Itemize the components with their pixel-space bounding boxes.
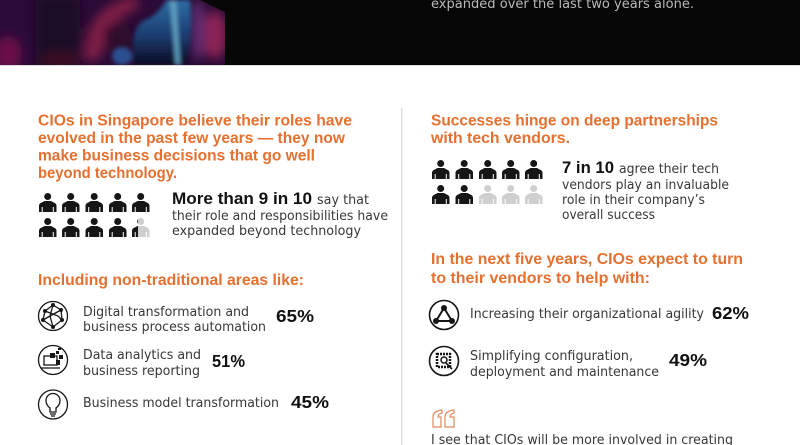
heading: successes hinge: Successes hinge on deep partnerships (431, 112, 718, 130)
stat: more than 9 in 10 (172, 190, 388, 239)
item: data analytics (38, 346, 245, 379)
item: business model: 45% (291, 392, 329, 412)
header band (0, 0, 800, 72)
stat: 7 in 10: overall success (562, 208, 655, 223)
icon: light bulb (38, 390, 68, 419)
item: digital transformation (38, 302, 314, 335)
icon: network (38, 302, 68, 330)
heading: successes hinge (430, 112, 718, 147)
stat: 7 in 10: 7 in 10 (562, 159, 614, 177)
heading: CIOs in Singapore (38, 112, 352, 182)
item: data analytics: Data analytics and (83, 348, 201, 363)
stat: 7 in 10: vendors play an invaluable (562, 178, 729, 193)
stat: more than 9 in 10: More than 9 in 10 (172, 190, 312, 208)
item: simplifying configuration: deployment and maintenance (470, 365, 659, 380)
icon: quotation mark (433, 410, 454, 427)
heading: CIOs in Singapore: CIOs in Singapore believe their roles have (38, 112, 352, 130)
people icons: 9 in 10 (39, 193, 150, 237)
item: digital transformation: business process automation (83, 320, 266, 335)
item: simplifying configuration (430, 346, 707, 380)
item: organizational agility: Increasing their organizational agility (470, 307, 704, 322)
icon: laptop with data (38, 346, 68, 374)
heading: non-traditional areas: Including non-traditional areas like: (38, 272, 304, 289)
icon: agility cycle (430, 300, 458, 330)
heading: CIOs in Singapore: evolved in the past few years — they now (38, 130, 346, 147)
icon: chip (430, 346, 458, 376)
stat: 7 in 10: agree their tech (619, 162, 719, 177)
header abstract image (0, 0, 225, 65)
heading: CIOs in Singapore: make business decisions that go well (38, 148, 315, 164)
item: simplifying configuration: Simplifying configuration, (470, 349, 633, 364)
stat: 7 in 10: role in their company’s (562, 193, 705, 208)
item: organizational agility: 62% (712, 303, 749, 323)
item: business model: Business model transformation (83, 396, 279, 411)
stat: 7 in 10 (562, 159, 729, 223)
column divider (401, 108, 402, 445)
item: simplifying configuration: 49% (669, 350, 707, 370)
item: digital transformation: Digital transformation and (83, 305, 249, 320)
item: organizational agility (430, 300, 749, 330)
item: business model (38, 390, 329, 419)
heading: next five years (431, 251, 743, 287)
stat: more than 9 in 10: their role and responsibilities have (172, 208, 388, 224)
item: data analytics: business reporting (83, 364, 200, 379)
heading: CIOs in Singapore: beyond technology. (38, 165, 177, 182)
heading: next five years: to their vendors to help with: (431, 270, 650, 287)
people icons: 7 in 10 (432, 160, 542, 204)
heading: successes hinge: with tech vendors. (430, 130, 570, 147)
stat: more than 9 in 10: expanded beyond technology (172, 223, 361, 239)
heading: next five years: In the next five years, CIOs expect to turn (431, 251, 743, 268)
item: data analytics: 51% (212, 351, 245, 371)
item: digital transformation: 65% (276, 306, 314, 326)
stat: more than 9 in 10: say that (317, 192, 369, 208)
